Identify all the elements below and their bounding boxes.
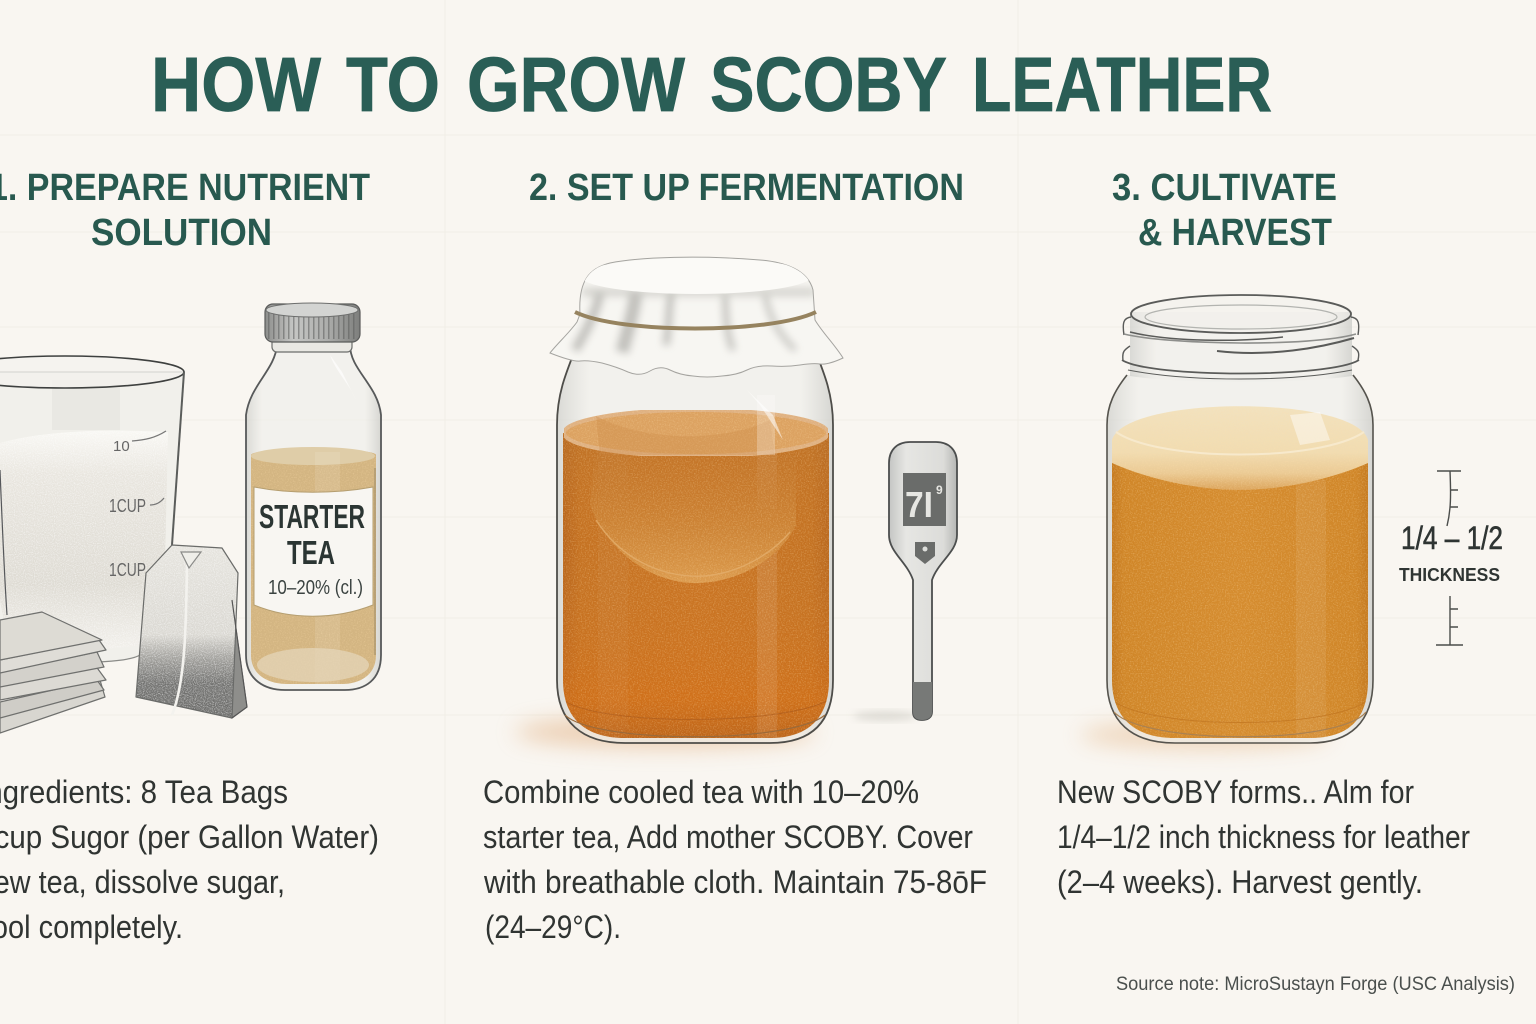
body text: step 3 [1057, 774, 1470, 900]
illustration: measuring cup of sugar: 1CUP [109, 496, 146, 516]
thickness label [1399, 520, 1503, 585]
panel: step 1 prepare nutrient solution [0, 167, 381, 945]
body text: step 3: (2–4 weeks). Harvest gently. [1057, 864, 1423, 900]
illustration: tea bag [136, 545, 247, 718]
heading: step 3: 3. CULTIVATE [1112, 167, 1337, 209]
mother SCOBY [590, 455, 796, 583]
illustration: measuring cup of sugar [0, 356, 184, 663]
illustration: fermentation jar with cloth cover [550, 257, 843, 745]
bottle label text: 10–20% (cl.) [268, 577, 363, 599]
bottle label text: TEA [287, 534, 335, 571]
illustration: digital thermometer [853, 442, 957, 721]
illustration: starter tea bottle [246, 303, 381, 690]
panel: step 2 set up fermentation [483, 167, 987, 945]
thermometer display [903, 473, 946, 526]
heading: step 1 [0, 167, 370, 254]
illustration: measuring cup of sugar: 1CUP [109, 560, 146, 580]
liquid [1112, 463, 1368, 738]
bottle label text: STARTER [259, 498, 365, 535]
heading: step 2: 2. SET UP FERMENTATION [529, 167, 964, 209]
illustration: stack of tea bags [0, 612, 106, 733]
illustration: harvest jar with new SCOBY [1105, 295, 1375, 745]
title [151, 42, 1272, 128]
body text: step 3: 1/4–1/2 inch thickness for leather [1057, 819, 1470, 855]
thermometer display: 7I [905, 484, 933, 525]
bottle label text [259, 498, 365, 599]
liquid surface [564, 410, 828, 456]
heading: step 3 [1112, 167, 1337, 254]
title: LEATHER [972, 42, 1272, 128]
body text: step 3: New SCOBY forms.. Alm for [1057, 774, 1414, 810]
title: TO [346, 42, 440, 128]
jar shadow [1080, 721, 1330, 749]
thickness label: THICKNESS [1399, 565, 1500, 585]
thermometer display: 9 [936, 483, 943, 497]
jar glass outline [1107, 375, 1373, 743]
title: HOW [151, 42, 321, 128]
heading: step 1: SOLUTION [91, 212, 272, 254]
body text: step 2: (24–29°C). [485, 909, 621, 945]
body text: step 2: Combine cooled tea with 10–20% [483, 774, 919, 810]
heading: step 1: 1. PREPARE NUTRIENT [0, 167, 370, 209]
body text: step 2: with breathable cloth. Maintain 75-8ōF [483, 864, 987, 900]
heading: step 3: & HARVEST [1138, 212, 1332, 254]
jar neck and threads [1122, 295, 1359, 382]
jar shadow [515, 716, 815, 748]
body text: step 2 [483, 774, 987, 945]
body text: step 2: starter tea, Add mother SCOBY. Cover [483, 819, 973, 855]
illustration: measuring cup of sugar: 10 [113, 438, 130, 455]
title: GROW [467, 42, 685, 128]
source note: Source note: MicroSustayn Forge (USC Analysis) [1116, 974, 1515, 995]
thickness scale [1436, 471, 1463, 645]
title: SCOBY [710, 42, 947, 128]
thickness label: 1/4 – 1/2 [1401, 520, 1503, 556]
tea liquid [555, 430, 840, 745]
new SCOBY layer [1112, 406, 1368, 490]
body text: step 1 [0, 774, 379, 945]
panel: step 3 cultivate and harvest [1057, 167, 1503, 900]
bottle cap [265, 303, 360, 342]
cloth cover [550, 257, 843, 377]
